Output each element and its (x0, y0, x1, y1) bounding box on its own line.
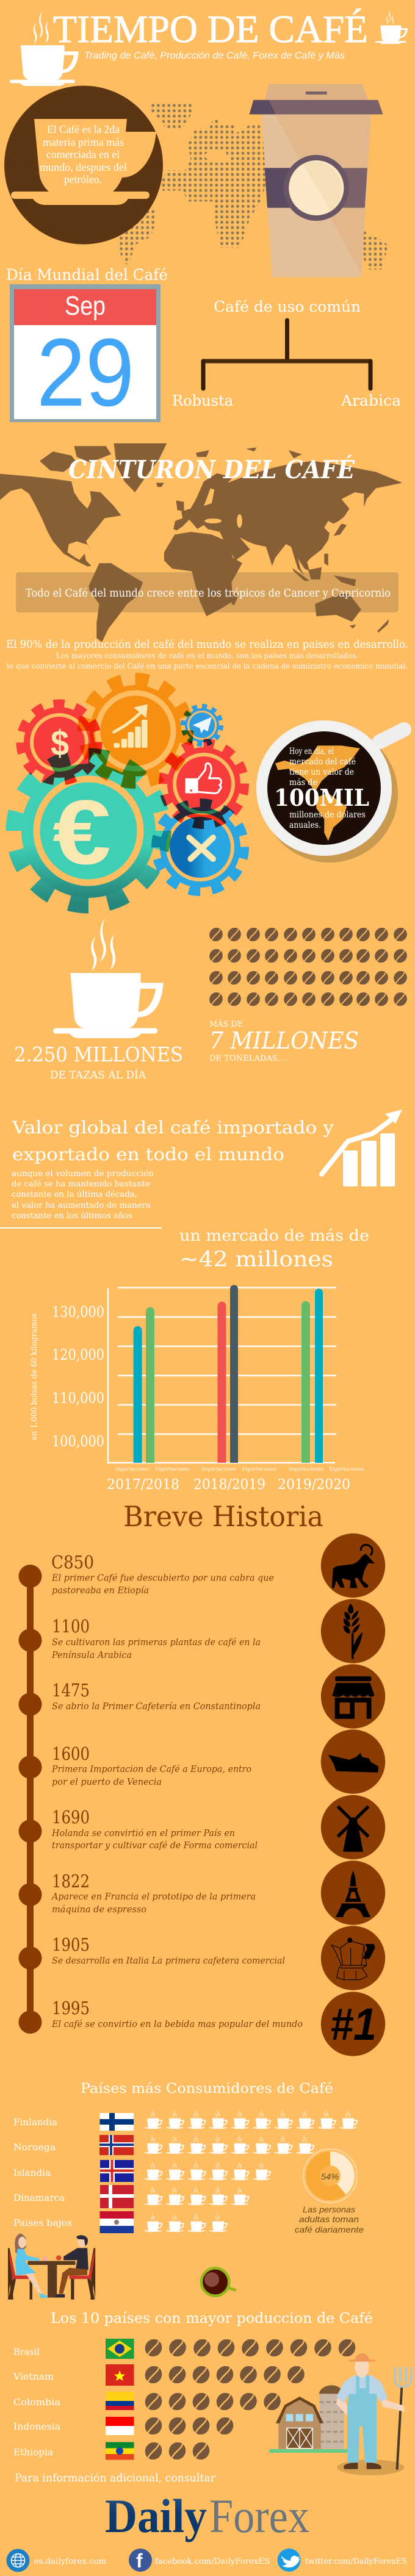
text block: value paragraph: constante en la última década, (12, 1190, 137, 1199)
market value text: anuales. (289, 820, 321, 830)
calendar: 29 (37, 319, 134, 426)
event: 1100: Península Arabica (51, 1651, 132, 1660)
gears (15, 680, 244, 905)
icon: small coffee cup (375, 10, 408, 44)
years: 2017/2018 (107, 1477, 179, 1493)
event: 1822: Aparece en Francia el prototipo de la primera (51, 1892, 256, 1902)
footer: facebook: facebook.com/DailyForexES (155, 2557, 270, 2566)
flag: Indonesia (106, 2417, 134, 2435)
icon: paper plane (193, 717, 212, 733)
x axis labels: Exportaciones (155, 1466, 190, 1472)
calendar: Sep (65, 291, 106, 321)
illustration: barn and silo (269, 2385, 347, 2453)
illustration: couple at a table (8, 2233, 95, 2300)
cup shadow (261, 726, 398, 863)
row: Indonesia: Indonesia (13, 2421, 60, 2432)
text block: value paragraph: aunque el volumen de producción (12, 1169, 154, 1179)
event: C850: pastoreaba en Etiopía (52, 1586, 149, 1596)
heading: world coffee day: Día Mundial del Café (6, 266, 168, 284)
x axis labels: Importaciones (201, 1466, 236, 1472)
event: 1822: 1822 (52, 1871, 90, 1892)
donut chart: 54% (303, 2149, 357, 2203)
icon: coffee plant (321, 1599, 385, 1663)
footer: facebook (129, 2549, 270, 2572)
flag: Vietnam (106, 2364, 134, 2386)
icon: growth bars (114, 704, 148, 748)
row: Islandia: Islandia (13, 2167, 51, 2178)
title: TIEMPO DE CAFÉ (53, 8, 368, 51)
cup handle (380, 730, 404, 742)
row: Colombia (13, 2389, 284, 2414)
row: Noruega: Noruega (13, 2142, 56, 2153)
event: 1690 (51, 1807, 258, 1851)
stat: cups per day (14, 1042, 183, 1082)
market value text: más de (289, 778, 317, 788)
row: Ethiopia (13, 2439, 212, 2463)
heading: global value: Valor global del café importado y (12, 1118, 334, 1138)
timeline (18, 1565, 42, 2034)
icon: store (321, 1664, 385, 1729)
icon: moka pot (321, 1926, 385, 1990)
footer: twitter (278, 2549, 407, 2572)
event: 1600: 1600 (52, 1743, 90, 1764)
market value text: 100MIL (274, 784, 369, 811)
flag: Norway (99, 2135, 134, 2155)
event: 1995 (51, 1998, 303, 2029)
x axis labels: Exportaciones (329, 1466, 364, 1472)
event: 1690: Holanda se convirtió en el primer País en (51, 1829, 235, 1839)
icon: paper coffee cup (250, 84, 383, 277)
calendar (10, 284, 161, 426)
cups (144, 2161, 271, 2180)
icon: euro: € (52, 781, 111, 883)
row: Vietnam: Vietnam (13, 2371, 54, 2382)
event: 1690: 1690 (52, 1807, 90, 1828)
icon: large coffee cup (10, 11, 79, 86)
text block: value paragraph: el valor ha aumentado de manera (12, 1201, 151, 1210)
heading: common coffee: Café de uso común (214, 298, 361, 315)
event: 1905: 1905 (52, 1934, 90, 1955)
event: 1100: Se cultivaron las primeras plantas de café en la (52, 1638, 261, 1648)
text block: value paragraph: de café se ha mantenido bastante (12, 1180, 150, 1189)
caption: adults drink coffee daily (295, 2205, 364, 2234)
label: robusta: Robusta (172, 392, 233, 409)
event: 1100 (51, 1616, 261, 1660)
event: 1475: 1475 (52, 1680, 90, 1701)
event: 1822 (51, 1871, 256, 1915)
heading: top producers: Los 10 países con mayor poduccion de Café (51, 2311, 373, 2327)
donut chart: 54%: 54% (321, 2172, 339, 2181)
event: C850: El primer Café fue descubierto por una cabra que (51, 1574, 274, 1584)
gear: blue wrench (156, 803, 244, 891)
beans (142, 2389, 284, 2414)
footer: facebook: f (136, 2550, 143, 2572)
event: 1822: máquina de espresso (52, 1905, 146, 1915)
beans (142, 2439, 212, 2463)
fact text: petróleo. (64, 173, 102, 185)
text: further information: Para información adicional, consultar (15, 2472, 215, 2485)
text block: value paragraph: constante en los últimos años (12, 1211, 132, 1221)
text block: production in developing countries: lo que convierte al comercio del Café en una parte escencial de la cadena de suministro economico mundial. (7, 662, 408, 670)
x axis labels: Importaciones (115, 1466, 150, 1472)
event: 1905 (52, 1934, 285, 1966)
belt note: Todo el Café del mundo crece entre los trópicos de Cancer y Capricornio (26, 587, 391, 600)
stat: cups per day: DE TAZAS AL DÍA (50, 1069, 146, 1082)
gear: orange (84, 680, 187, 782)
years: 2019/2020 (278, 1477, 350, 1493)
row: Vietnam (13, 2363, 308, 2387)
row: Paises bajos (13, 2211, 228, 2233)
icon: thumbs up (186, 763, 221, 793)
row: Brasil (13, 2336, 358, 2360)
fact text: materia prima más (43, 136, 124, 148)
row: Finlandia: Finlandia (13, 2117, 57, 2128)
stat: tonnes: 7 MILLONES (209, 1027, 359, 1054)
icon: ship (321, 1729, 385, 1794)
stat: tonnes: DE TONELADAS…. (209, 1054, 288, 1063)
event: 1995: 1995 (52, 1998, 90, 2018)
event: 1475 (52, 1680, 261, 1712)
icon: eiffel tower (321, 1860, 385, 1925)
fact text (40, 123, 127, 185)
event: 1475: Se abrio la Primer Cafetería en Constantinopla (52, 1702, 261, 1712)
event: 1100: 1100 (52, 1616, 90, 1637)
text block: production in developing countries (6, 638, 408, 670)
icon: wrench and screwdriver (189, 838, 213, 859)
event: 1600 (51, 1743, 251, 1787)
coffee cup with market value (256, 720, 404, 863)
icon: dollar: $ (51, 723, 69, 763)
stat: tonnes (209, 1019, 359, 1063)
flag: Denmark (100, 2185, 134, 2208)
footer: website: es.dailyforex.com (34, 2557, 106, 2566)
years: 2018/2019 (193, 1477, 265, 1493)
icon: windmill (321, 1795, 385, 1859)
beans (142, 2363, 308, 2387)
row: Ethiopia: Ethiopia (13, 2447, 53, 2458)
heading: global value: exportado en todo el mundo (12, 1144, 284, 1164)
row: Brasil: Brasil (13, 2346, 40, 2357)
row: Colombia: Colombia (13, 2397, 60, 2408)
caption: adults drink coffee daily: adultas toman (299, 2214, 359, 2224)
dotted world map (119, 103, 388, 270)
cup silhouette (11, 119, 156, 205)
fact text: El Café es la 2da (47, 123, 120, 135)
heading: global value (12, 1118, 334, 1164)
heading: top consumers: Países más Consumidores de Café (81, 2081, 333, 2097)
row: Paises bajos: Paises bajos (13, 2217, 72, 2228)
cups (144, 2186, 250, 2205)
icon: steaming cup (53, 918, 164, 1038)
flag: Colombia (106, 2392, 134, 2410)
icon: rising bars and arrow (322, 1110, 402, 1186)
market value text: millones de dólares (289, 810, 366, 820)
event: 1690: transportar y cultivar café de Forma comercial (52, 1841, 258, 1851)
fact text: mundo, despues del (40, 161, 127, 173)
y axis labels: 120,000 (52, 1346, 104, 1363)
row: Finlandia (13, 2109, 358, 2131)
bars (134, 1285, 323, 1463)
panel: coffee belt (0, 443, 402, 642)
market value text: tiene un valor de (289, 767, 354, 777)
event: C850: C850 (51, 1552, 94, 1573)
row: Dinamarca: Dinamarca (13, 2192, 65, 2203)
event: 1905: Se desarrolla en Italia La primera cafetera comercial (52, 1956, 285, 1966)
illustration: farmer (336, 2353, 412, 2475)
event: C850 (51, 1552, 274, 1596)
tree diagram (203, 320, 370, 389)
gear: red thumb (164, 744, 244, 824)
stat: cups per day: 2.250 MILLONES (14, 1042, 183, 1066)
gear: teal (15, 757, 162, 905)
row: Indonesia (13, 2414, 236, 2438)
market value text: Hoy en día, el (289, 747, 334, 756)
footer: twitter: twitter.com/DailyForexES (305, 2557, 407, 2566)
years (107, 1477, 350, 1493)
y axis labels: 110,000 (52, 1390, 104, 1407)
world map (0, 443, 402, 642)
y axis labels: 100,000 (52, 1433, 104, 1450)
panel: dark circle with cup and fact (4, 85, 163, 244)
icon: number one: #1 (330, 1999, 377, 2050)
flag: Paises bajos (100, 2211, 134, 2233)
market value text: mercado del café (289, 757, 356, 767)
stat: tonnes: MÁS DE (209, 1019, 243, 1029)
event: 1600: por el puerto de Venecia (52, 1778, 162, 1787)
bar chart (30, 1285, 364, 1493)
flag: Brazil (106, 2339, 134, 2359)
heading: market size: un mercado de más de (179, 1227, 369, 1244)
text block: production in developing countries: Los mayores consumidores de café en el mundo, son los países más desarrollados. (56, 651, 358, 660)
logo: DailyForex: Forex (209, 2489, 309, 2542)
icon: coffee cup top view (200, 2267, 235, 2297)
heading: market size: ~42 millones (179, 1247, 333, 1272)
map on coffee (275, 745, 360, 841)
event: 1600: Primera Importacion de Café a Europa, entro (51, 1765, 251, 1774)
x axis labels: Exportaciones (242, 1466, 276, 1472)
row: Islandia (13, 2160, 271, 2182)
belt title: CINTURON DEL CAFÉ (68, 454, 355, 484)
beans (142, 2336, 358, 2360)
dark circle (4, 85, 163, 244)
gear: red dollar (21, 704, 98, 781)
subtitle: Trading de Café, Producción de Café, Forex de Café y Más (84, 51, 345, 61)
translucent band (16, 572, 399, 612)
flag: Iceland (100, 2160, 134, 2182)
text block: value paragraph (12, 1169, 154, 1221)
y axis title: en 1,000 bolsas de 60 kilogramos (30, 1313, 39, 1440)
logo: DailyForex: Daily (105, 2489, 207, 2542)
heading: brief history: Breve Historia (123, 1500, 323, 1533)
bean grid (207, 925, 410, 1008)
row: Dinamarca (13, 2185, 250, 2208)
logo: DailyForex (105, 2489, 309, 2542)
cups (144, 2212, 228, 2232)
fact text: comerciada en el (46, 148, 120, 160)
row: Noruega (13, 2134, 314, 2155)
icon: goat (321, 1534, 385, 1598)
y axis labels (52, 1304, 104, 1450)
event: 1995: El café se convirtio en la bebida mas popular del mundo (51, 2020, 303, 2029)
flag: Finland (100, 2113, 134, 2131)
icon: number one (321, 1992, 385, 2056)
caption: adults drink coffee daily: café diariamente (295, 2225, 364, 2234)
caption: adults drink coffee daily: Las personas (303, 2205, 355, 2214)
cup rim (256, 720, 392, 856)
beans (142, 2414, 236, 2438)
label: arabica: Arabica (341, 392, 401, 409)
heading: market size (179, 1227, 369, 1272)
footer: website (6, 2549, 106, 2572)
cups (144, 2134, 314, 2154)
gear: small blue (183, 706, 221, 744)
flag: Ethiopia (106, 2442, 134, 2459)
market value text (274, 747, 369, 830)
cups (144, 2109, 358, 2129)
y axis labels: 130,000 (52, 1304, 104, 1321)
x axis labels (115, 1466, 364, 1472)
x axis labels: Importaciones (289, 1466, 323, 1472)
